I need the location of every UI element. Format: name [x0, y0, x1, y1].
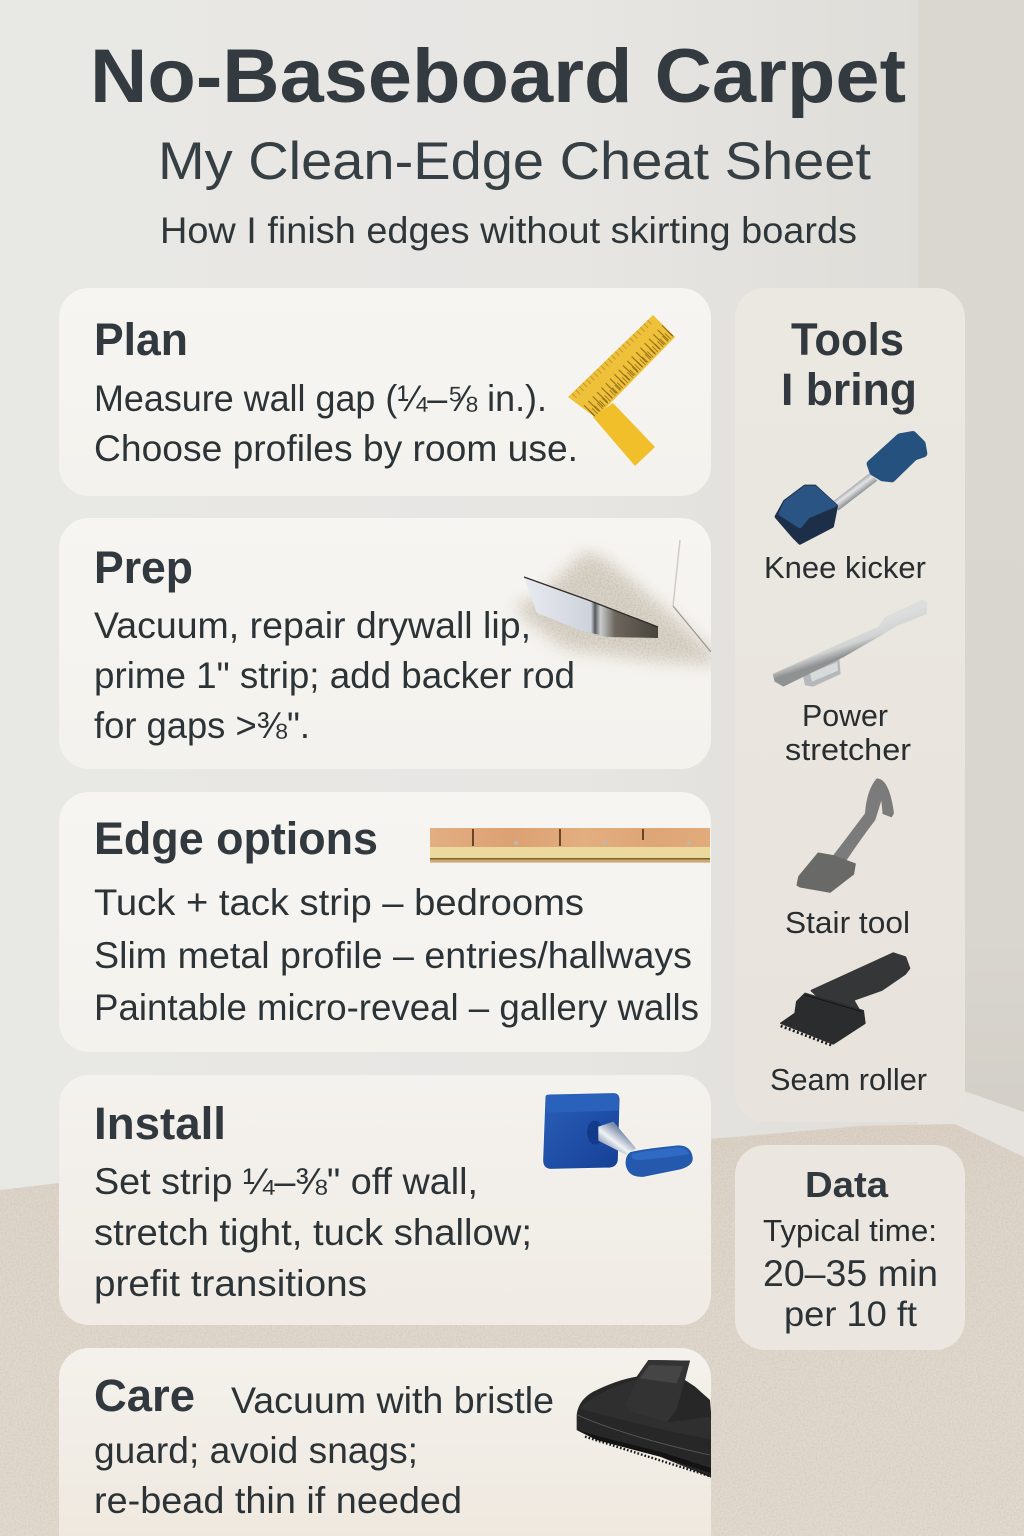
prep text: for gaps >⅜".	[94, 705, 310, 746]
prep text	[94, 605, 575, 746]
heading: tools: I bring	[781, 364, 917, 415]
prep text: prime 1" strip; add backer rod	[94, 655, 575, 696]
subtitle: My Clean-Edge Cheat Sheet	[158, 132, 871, 191]
care text: guard; avoid snags;	[94, 1430, 418, 1471]
heading: tools	[781, 314, 917, 415]
edge options list: Paintable micro-reveal – gallery walls	[94, 987, 699, 1028]
install text: stretch tight, tuck shallow;	[94, 1212, 532, 1253]
panel: edge options	[59, 792, 711, 1052]
panel: tools I bring	[735, 288, 965, 1122]
heading: care: Care	[94, 1370, 195, 1421]
install text	[94, 1161, 532, 1304]
panel: care	[59, 1348, 717, 1536]
heading: edge options: Edge options	[94, 813, 378, 864]
install text: prefit transitions	[94, 1263, 367, 1304]
prep photo: carpet tucked behind a metal blade	[515, 540, 716, 664]
care text: Vacuum with bristle	[231, 1380, 554, 1421]
tagline: How I finish edges without skirting boards	[160, 210, 857, 251]
icon: power stretcher	[773, 599, 927, 687]
panel: prep	[59, 518, 716, 769]
data text: per 10 ft	[784, 1295, 917, 1334]
label: seam roller: Seam roller	[770, 1062, 927, 1097]
label: power stretcher: stretcher	[785, 732, 911, 767]
icon: tack strip on wood	[430, 828, 710, 863]
icon: blue knee kicker	[543, 1093, 693, 1177]
edge options list	[94, 882, 699, 1028]
icon: knee kicker	[777, 435, 923, 543]
panel: data	[735, 1145, 965, 1350]
heading: data: Data	[805, 1164, 889, 1205]
heading: tools: Tools	[791, 314, 904, 365]
label: power stretcher	[785, 698, 911, 767]
plan text	[94, 378, 578, 469]
install text: Set strip ¼–⅜" off wall,	[94, 1161, 478, 1202]
icon: seam roller	[781, 953, 909, 1046]
plan text: Measure wall gap (¼–⅝ in.).	[94, 378, 547, 419]
title: No-Baseboard Carpet	[90, 34, 906, 119]
panel: install	[59, 1075, 711, 1325]
label: knee kicker: Knee kicker	[764, 550, 926, 585]
edge options list: Slim metal profile – entries/hallways	[94, 935, 692, 976]
icon: stair tool	[797, 778, 894, 892]
heading: plan: Plan	[94, 314, 188, 365]
icon: vacuum nozzle	[577, 1360, 717, 1480]
data text	[763, 1213, 938, 1334]
heading: install: Install	[94, 1098, 226, 1149]
icon: folding yellow ruler	[568, 315, 675, 466]
plan text: Choose profiles by room use.	[94, 428, 578, 469]
care text: re-bead thin if needed	[94, 1480, 462, 1521]
care text	[94, 1380, 554, 1521]
label: stair tool: Stair tool	[785, 905, 910, 940]
heading: prep: Prep	[94, 542, 193, 593]
data text: 20–35 min	[763, 1253, 938, 1294]
panel: plan	[59, 288, 711, 496]
edge options list: Tuck + tack strip – bedrooms	[94, 882, 584, 923]
label: power stretcher: Power	[802, 698, 888, 733]
prep text: Vacuum, repair drywall lip,	[94, 605, 531, 646]
data text: Typical time:	[763, 1213, 937, 1248]
